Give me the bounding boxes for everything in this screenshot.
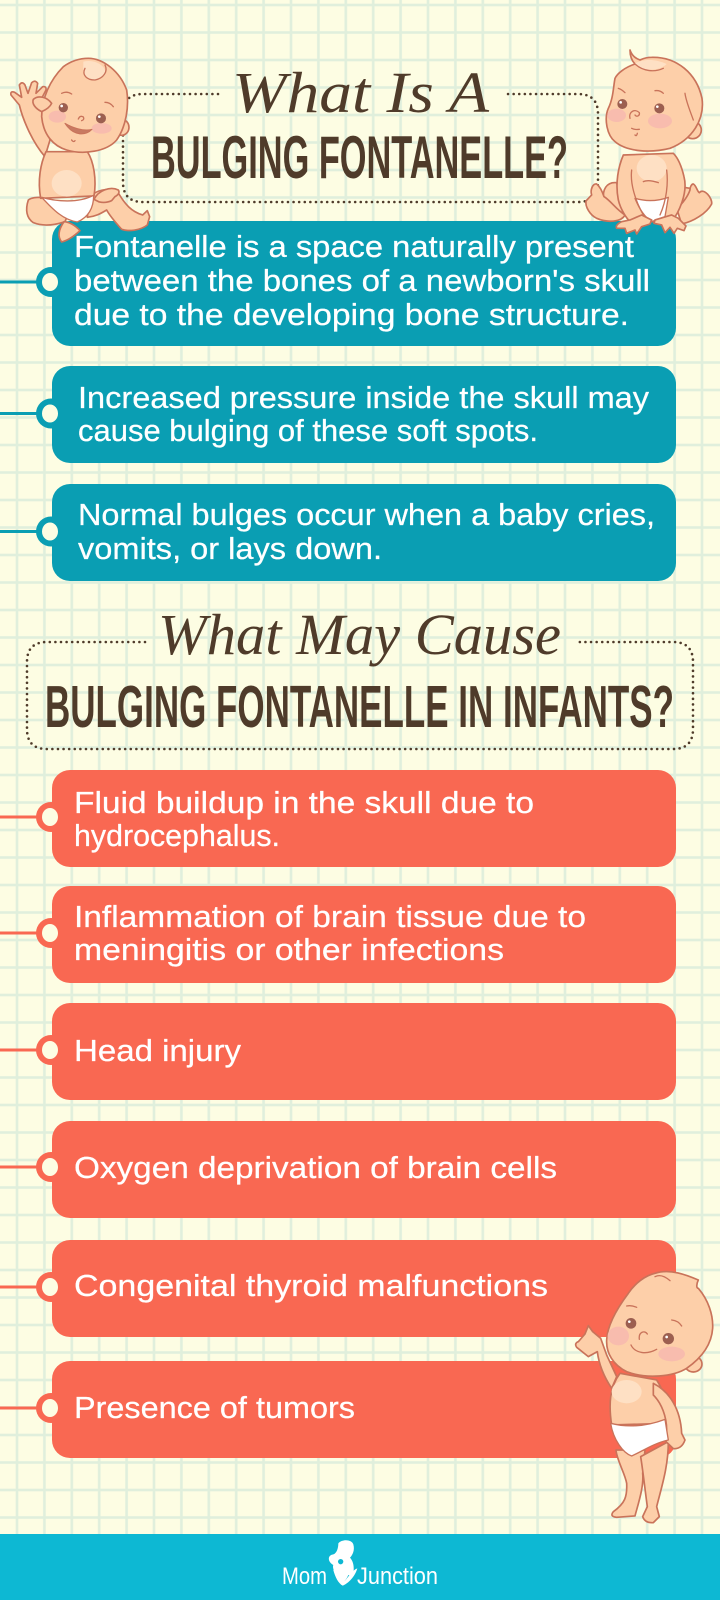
fact card 3: Normal bulges occur when a baby cries, bbox=[78, 497, 655, 532]
cause card 2: meningitis or other infections bbox=[74, 932, 504, 967]
cause card 1: hydrocephalus. bbox=[74, 818, 280, 853]
fact card 1: due to the developing bone structure. bbox=[74, 297, 629, 332]
cause card 6 bbox=[0, 1361, 676, 1458]
logo: MomJunction: Mom bbox=[282, 1563, 327, 1590]
footer band bbox=[0, 1534, 720, 1600]
cause card 3: Head injury bbox=[74, 1033, 242, 1068]
heading: what is a bulging fontanelle: What Is A bbox=[232, 60, 490, 125]
cause card 6: Presence of tumors bbox=[74, 1390, 355, 1425]
fact card 3 bbox=[0, 484, 676, 581]
icon: sitting baby looking up bbox=[586, 50, 712, 234]
cause card 5 bbox=[0, 1240, 676, 1337]
icon: waving sitting baby bbox=[11, 58, 150, 242]
fact card 1: between the bones of a newborn's skull bbox=[74, 263, 650, 298]
fact card 2 bbox=[0, 366, 676, 463]
fact card 3: vomits, or lays down. bbox=[78, 531, 382, 566]
cause card 1: Fluid buildup in the skull due to bbox=[74, 785, 534, 820]
panel: causes bbox=[0, 770, 676, 1458]
cause card 3 bbox=[0, 1003, 676, 1100]
heading: what may cause bulging fontanelle in infants bbox=[27, 602, 693, 749]
fact card 1: Fontanelle is a space naturally present bbox=[74, 229, 634, 264]
cause card 2: Inflammation of brain tissue due to bbox=[74, 899, 586, 934]
cause card 4: Oxygen deprivation of brain cells bbox=[74, 1150, 557, 1185]
heading: what may cause bulging fontanelle in infants: What May Cause bbox=[158, 602, 561, 667]
fact card 2: Increased pressure inside the skull may bbox=[78, 380, 650, 415]
cause card 4 bbox=[0, 1121, 676, 1218]
fact card 2: cause bulging of these soft spots. bbox=[78, 413, 538, 448]
icon: standing baby pointing up bbox=[576, 1272, 713, 1523]
icon: mother and child bbox=[329, 1540, 357, 1586]
cause card 1 bbox=[0, 770, 676, 867]
fact card 1 bbox=[0, 221, 676, 346]
cause card 2 bbox=[0, 886, 676, 983]
heading: what is a bulging fontanelle bbox=[123, 60, 598, 202]
logo: MomJunction bbox=[282, 1540, 438, 1590]
cause card 5: Congenital thyroid malfunctions bbox=[74, 1268, 548, 1303]
logo: MomJunction: Junction bbox=[357, 1563, 438, 1590]
panel: definition facts bbox=[0, 221, 676, 581]
